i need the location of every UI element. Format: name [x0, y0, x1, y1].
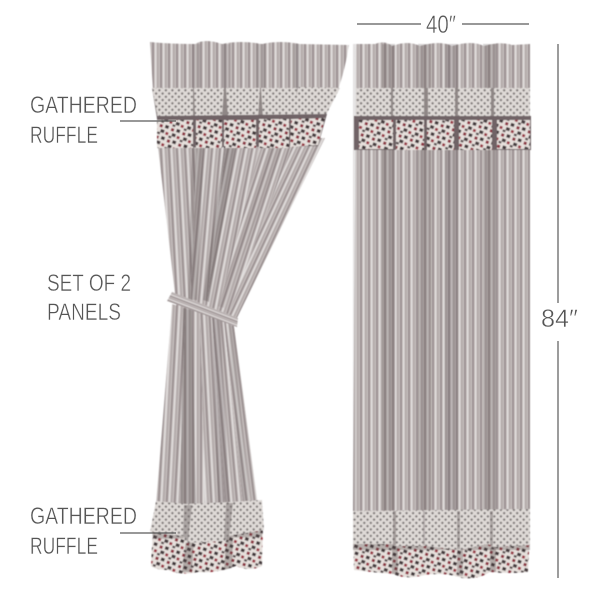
curtain: left panel tied back [150, 41, 349, 574]
label: set of 2 panels [47, 270, 131, 326]
leader line: top ruffle [120, 120, 176, 122]
label: set of 2 panels: PANELS [47, 299, 121, 326]
bottom upper ruffle tier [353, 509, 530, 550]
lower drape [156, 304, 258, 505]
fold shadows [353, 44, 496, 512]
bottom lower ruffle tier [353, 534, 530, 578]
upper ruffle tier [152, 87, 340, 119]
tieback [167, 292, 238, 327]
leader line: bottom ruffle [120, 532, 176, 534]
upper drape converging to tieback [157, 138, 325, 320]
bottom upper ruffle [150, 500, 264, 543]
body stripes [353, 42, 530, 516]
label: top gathered ruffle: RUFFLE [30, 122, 98, 149]
label: top gathered ruffle: GATHERED [30, 92, 137, 119]
top upper ruffle tier [356, 88, 530, 119]
bottom lower ruffle [151, 526, 263, 574]
label: bottom gathered ruffle: RUFFLE [30, 533, 98, 560]
label: bottom gathered ruffle: GATHERED [30, 503, 137, 530]
dimension: height 84 inches: 84″ [541, 305, 578, 333]
top lower ruffle tier [354, 116, 531, 150]
lower ruffle tier [157, 114, 327, 148]
label: set of 2 panels: SET OF 2 [47, 270, 131, 297]
label: bottom gathered ruffle [30, 503, 137, 560]
curtain: right panel hanging straight [353, 42, 531, 578]
header stripes [150, 41, 349, 90]
dimension: width 40 inches: 40″ [426, 11, 456, 39]
label: top gathered ruffle [30, 92, 137, 149]
